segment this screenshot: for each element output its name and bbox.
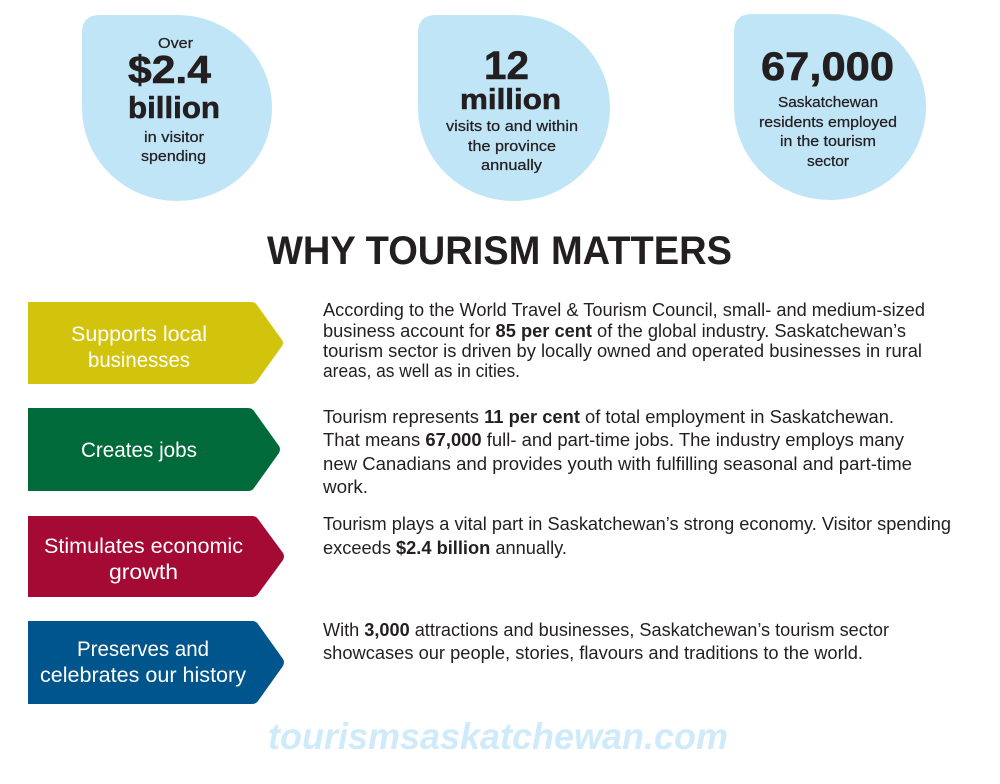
text: creates jobs: Tourism represents 11 per cent of total employment in Saskatchewan. [323,407,894,427]
text: creates jobs: That means 67,000 full- and part-time jobs. The industry employs many [323,430,904,450]
text: stimulates economic growth: exceeds $2.4 billion annually. [323,538,567,558]
text: supports local businesses: areas, as well as in cities. [323,361,520,381]
text: creates jobs [322,407,912,497]
text: supports local businesses: business account for 85 per cent of the global industry. Saskatchewan’s [323,321,906,341]
title: WHY TOURISM MATTERS [267,229,732,273]
arrow: supports local businesses: businesses [88,348,190,372]
stat text: in the tourism [780,134,876,150]
blob [734,14,926,200]
stat: visitor spending [82,15,272,201]
text: creates jobs: new Canadians and provides youth with fulfilling seasonal and part-time [323,454,912,474]
text: supports local businesses [323,300,925,381]
stat text: $2.4 [128,49,211,92]
stat text: in visitor [144,130,204,146]
text: creates jobs: work. [322,477,368,497]
text: supports local businesses: According to the World Travel & Tourism Council, small- and medium-sized [323,300,925,320]
stat: employment [734,14,926,200]
arrow: supports local businesses: Supports local [71,322,207,346]
stat text: billion [128,90,220,125]
website url: tourismsaskatchewan.com [268,716,728,757]
arrow: stimulates economic growth [28,516,284,597]
stat text: residents employed [759,115,897,131]
text: supports local businesses: tourism sector is driven by locally owned and operated businesses in rural [323,341,922,361]
stat text [446,44,578,174]
text: preserves history: With 3,000 attractions and businesses, Saskatchewan’s tourism sector [323,620,889,640]
text: preserves history [323,620,889,663]
stat text: million [460,84,561,116]
arrow: preserves and celebrates our history: Preserves and [77,637,209,661]
blob [418,15,610,201]
stat text: sector [807,154,849,170]
blob [82,15,272,201]
stat text [759,45,897,170]
text: preserves history: showcases our people, stories, flavours and traditions to the world. [323,643,863,663]
stat text: 67,000 [761,45,894,89]
stat text: visits to and within [446,119,578,135]
stat text: 12 [484,44,529,88]
arrow: creates jobs [28,408,280,491]
arrow: stimulates economic growth: Stimulates economic [44,534,243,558]
stat text [128,36,220,165]
stat: visits [418,15,610,201]
stat text: Saskatchewan [778,95,878,111]
stat text: Over [158,36,193,52]
text: stimulates economic growth: Tourism plays a vital part in Saskatchewan’s strong economy. Visitor spending [323,514,951,534]
stat text: the province [468,139,556,155]
stat text: annually [481,158,543,174]
arrow: preserves and celebrates our history [28,621,284,704]
arrow: preserves and celebrates our history: celebrates our history [40,663,246,687]
text: stimulates economic growth [323,514,951,558]
stat text: spending [141,149,206,165]
arrow: stimulates economic growth: growth [109,560,178,584]
arrow: creates jobs: Creates jobs [81,438,197,462]
arrow: supports local businesses [28,302,283,384]
